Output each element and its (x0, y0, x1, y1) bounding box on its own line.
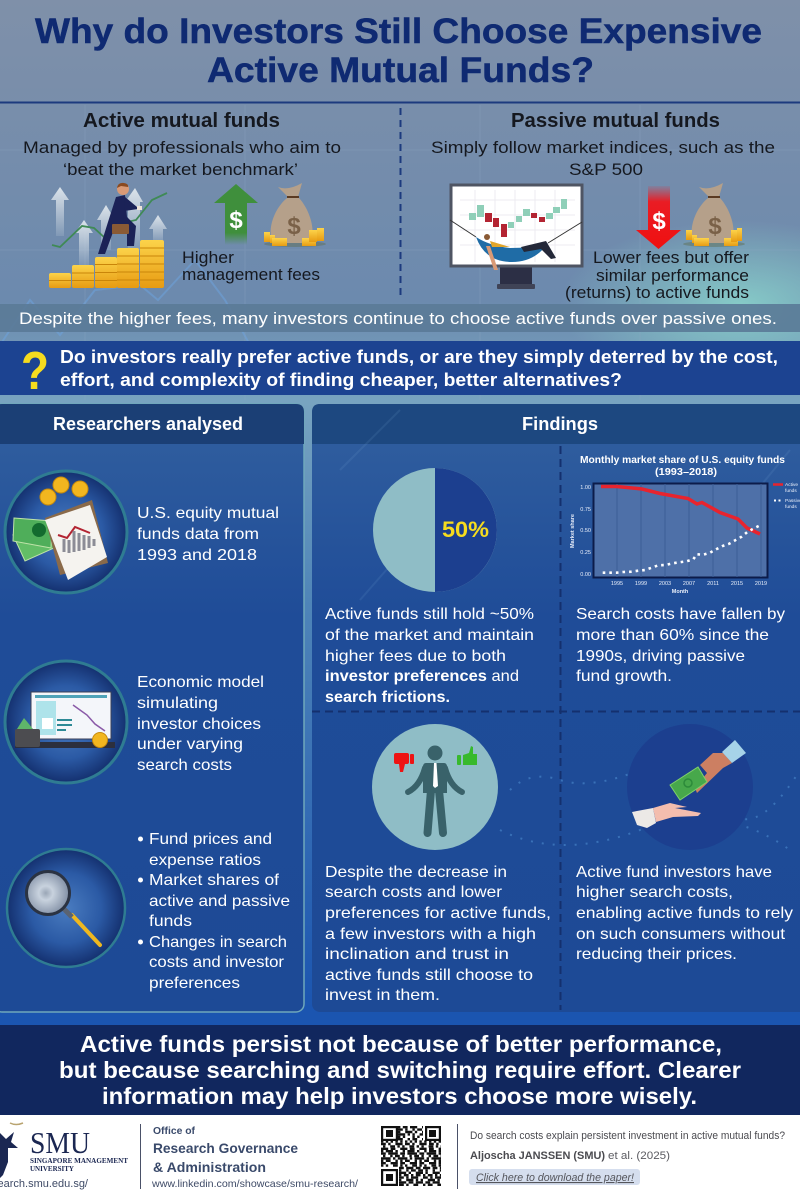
text: office of research governance (151, 1126, 358, 1190)
text: data list: costs and investor (149, 954, 285, 971)
icon: investor with thumbs up and down (372, 724, 498, 850)
icon: clipboard, cash and coins (5, 471, 127, 593)
text: data list: active and passive (149, 893, 290, 910)
icon: QR code (381, 1127, 441, 1185)
text: active description: ‘beat the market benchmark’ (63, 160, 298, 179)
panel: passive mutual funds (431, 110, 775, 302)
text: data list: funds (149, 913, 192, 930)
panel: researchers analysed (0, 404, 304, 1012)
icon: money bag: $ (287, 213, 301, 240)
text: office of research governance: Research Governance (153, 1140, 298, 1156)
text: data list (138, 831, 290, 992)
banner: research question (0, 341, 800, 401)
text: data list: preferences (149, 975, 240, 992)
text: passive description (431, 138, 775, 179)
chart: monthly market share: funds (785, 488, 797, 494)
text: finding four: Active fund investors have (576, 864, 772, 881)
chart: monthly market share: Market share (570, 514, 576, 548)
title (35, 12, 762, 90)
footer (0, 1115, 800, 1200)
conclusion banner (0, 1025, 800, 1115)
text: economic model: search costs (137, 757, 232, 774)
chart: monthly market share: 2011 (707, 581, 719, 587)
chart: monthly market share: 2007 (683, 581, 695, 587)
conclusion banner: information may help investors choose more wisely. (102, 1083, 697, 1109)
text: finding three: active funds still choose to (325, 967, 533, 984)
text: finding four: higher search costs, (576, 884, 733, 901)
heading: researchers analysed: Researchers analysed (53, 414, 243, 434)
heading: findings: Findings (522, 414, 598, 434)
chart: monthly market share: 1995 (611, 581, 623, 587)
text: finding one: investor preferences and (325, 668, 519, 685)
icon: green up arrow with dollar: $ (229, 207, 243, 234)
chart: monthly market share: 0.25 (580, 550, 591, 556)
text: higher management fees: management fees (182, 265, 320, 284)
text: finding two: Search costs have fallen by (576, 606, 785, 623)
icon: monitor with hammock and candles (450, 185, 582, 289)
text: active description: Managed by professionals who aim to (23, 138, 341, 157)
logo: SMU (0, 1123, 128, 1190)
logo: SMU: SMU (30, 1125, 90, 1160)
chart: monthly market share (570, 454, 800, 595)
panel: active mutual funds (23, 110, 341, 288)
text: finding four (576, 864, 793, 963)
text: passive description: Simply follow market indices, such as the (431, 138, 775, 157)
icon: magnifying glass (7, 849, 125, 967)
text: higher management fees (182, 248, 320, 284)
icon: red down arrow with dollar: $ (652, 208, 666, 235)
text: finding two: more than 60% since the (576, 627, 769, 644)
heading: active mutual funds: Active mutual funds (83, 110, 280, 132)
text: finding three: invest in them. (325, 987, 440, 1004)
text: lower fees: similar performance (596, 266, 749, 285)
chart: monthly market share: (1993–2018) (655, 466, 717, 478)
text: paper citation: Do search costs explain persistent investment in active mutual funds? (470, 1130, 785, 1142)
banner: despite the higher fees: Despite the higher fees, many investors continue to choose active funds over passive ones. (19, 309, 777, 328)
chart: monthly market share: 2015 (731, 581, 743, 587)
icon: green up arrow with dollar (214, 184, 258, 245)
text: finding three: search costs and lower (325, 884, 503, 901)
text: finding four: reducing their prices. (576, 946, 737, 963)
chart: monthly market share: 0.50 (580, 528, 591, 534)
text: lower fees: (returns) to active funds (565, 283, 749, 302)
icon: laptop with charts and wallet (5, 661, 127, 783)
text: finding one: Active funds still hold ~50% (325, 606, 534, 623)
text: finding four: on such consumers without (576, 926, 786, 943)
text: lower fees (565, 248, 749, 302)
text: paper citation (469, 1130, 785, 1185)
text: finding two: fund growth. (576, 668, 672, 685)
chart: monthly market share: Active (785, 482, 798, 488)
text: equity mutual funds data: U.S. equity mutual (137, 505, 279, 522)
text: equity mutual funds data: 1993 and 2018 (137, 547, 257, 564)
chart: monthly market share: 1999 (635, 581, 647, 587)
chart: monthly market share: Monthly market share of U.S. equity funds (580, 454, 785, 466)
icon: money bag (264, 183, 326, 247)
text: paper citation: et al. (2025) (608, 1150, 670, 1162)
text: economic model: under varying (137, 736, 243, 753)
text: finding three (325, 864, 551, 1004)
chart: 50 percent pie: 50% (442, 517, 489, 542)
text: economic model: simulating (137, 695, 218, 712)
text: question: effort, and complexity of finding cheaper, better alternatives? (60, 370, 622, 390)
text: finding three: preferences for active funds, (325, 905, 551, 922)
logo: SMU: UNIVERSITY (30, 1165, 74, 1173)
text: finding three: Despite the decrease in (325, 864, 507, 881)
text: data list: Changes in search (149, 934, 287, 951)
title: Active Mutual Funds? (207, 51, 594, 90)
text: finding one (325, 606, 534, 706)
text: paper citation: Click here to download the paper! (476, 1172, 634, 1184)
text: finding four: enabling active funds to rely (576, 905, 793, 922)
text: question: Do investors really prefer active funds, or are they simply deterred by the cost, (60, 347, 778, 367)
text: question (60, 347, 778, 390)
chart: monthly market share: 0.00 (580, 572, 591, 578)
icon: money bag (683, 183, 745, 247)
banner: despite the higher fees (0, 304, 800, 332)
text: equity mutual funds data (137, 505, 279, 564)
text: paper citation: Aljoscha JANSSEN (SMU) (470, 1150, 605, 1162)
logo: SMU: SINGAPORE MANAGEMENT (30, 1157, 128, 1165)
text: finding two: 1990s, driving passive (576, 648, 745, 665)
text: economic model (137, 674, 264, 774)
text: office of research governance: & Administration (153, 1159, 266, 1175)
text: data list: Fund prices and (149, 831, 272, 848)
chart: monthly market share: 2003 (659, 581, 671, 587)
icon: money bag: $ (708, 213, 722, 240)
panel: findings (312, 404, 800, 1012)
text: passive description: S&P 500 (569, 160, 643, 179)
conclusion banner: Active funds persist not because of better performance, (80, 1031, 722, 1057)
text: finding one: search frictions. (325, 689, 450, 706)
text: higher management fees: Higher (182, 248, 234, 267)
text: economic model: Economic model (137, 674, 264, 691)
chart: monthly market share: Month (672, 589, 689, 595)
text: finding three: inclination and trust in (325, 946, 509, 963)
text: economic model: investor choices (137, 716, 261, 733)
chart: monthly market share: 0.75 (580, 507, 591, 513)
icon: red down arrow with dollar (636, 186, 681, 249)
text: finding one: of the market and maintain (325, 627, 534, 644)
text: office of research governance: Office of (153, 1126, 196, 1137)
text: data list: Market shares of (149, 872, 280, 889)
text: finding two (576, 606, 785, 685)
conclusion banner: but because searching and switching require effort. Clearer (59, 1057, 741, 1083)
heading: passive mutual funds: Passive mutual funds (511, 110, 720, 132)
text: office of research governance: www.linkedin.com/showcase/smu-research/ (151, 1178, 358, 1190)
text: equity mutual funds data: funds data from (137, 526, 259, 543)
title: Why do Investors Still Choose Expensive (35, 12, 762, 51)
text: data list: expense ratios (149, 852, 261, 869)
text: finding three: a few investors with a high (325, 926, 536, 943)
icon: question mark: ? (21, 341, 49, 401)
chart: monthly market share: 2019 (755, 581, 767, 587)
text: lower fees: Lower fees but offer (593, 248, 749, 267)
text: finding one: higher fees due to both (325, 648, 506, 665)
chart: monthly market share: 1.00 (580, 485, 591, 491)
chart: monthly market share: funds (785, 504, 797, 510)
icon: climbing coins with businessman (49, 183, 167, 288)
text: active description (23, 138, 341, 179)
icon: hands passing money (627, 724, 753, 850)
chart: 50 percent pie (373, 468, 497, 592)
